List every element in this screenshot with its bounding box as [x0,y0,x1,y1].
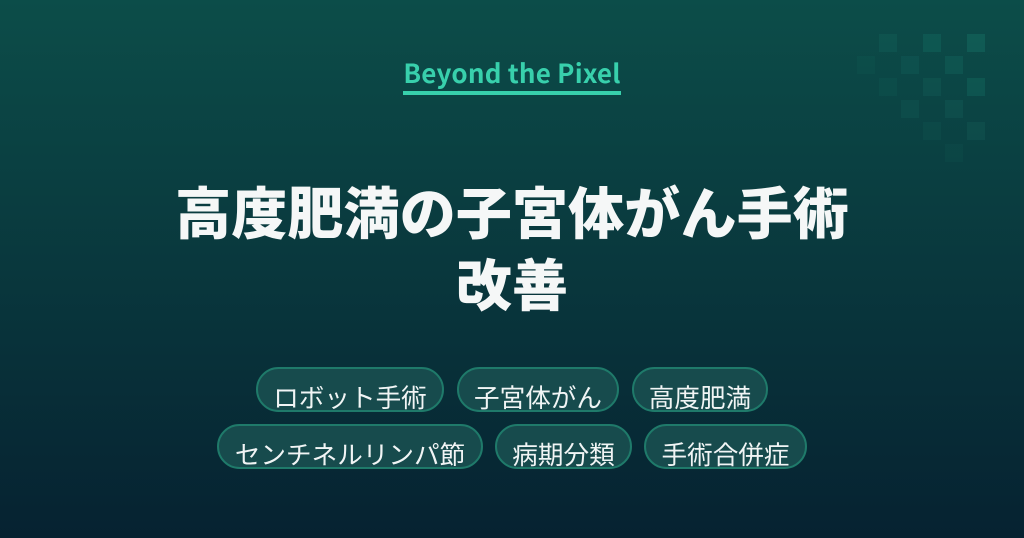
title: 改善 [456,242,568,323]
brand label: Beyond the Pixel [403,54,621,91]
tag: 高度肥満 [632,367,768,412]
title [175,170,849,323]
tag: ロボット手術 [256,367,444,412]
tag: 子宮体がん [457,367,619,412]
title: 高度肥満の子宮体がん手術 [175,170,849,251]
tag: センチネルリンパ節 [217,424,483,469]
tag: 手術合併症 [644,424,807,469]
tag: 病期分類 [495,424,632,469]
tags [217,367,807,469]
decorative square pattern [879,34,985,140]
